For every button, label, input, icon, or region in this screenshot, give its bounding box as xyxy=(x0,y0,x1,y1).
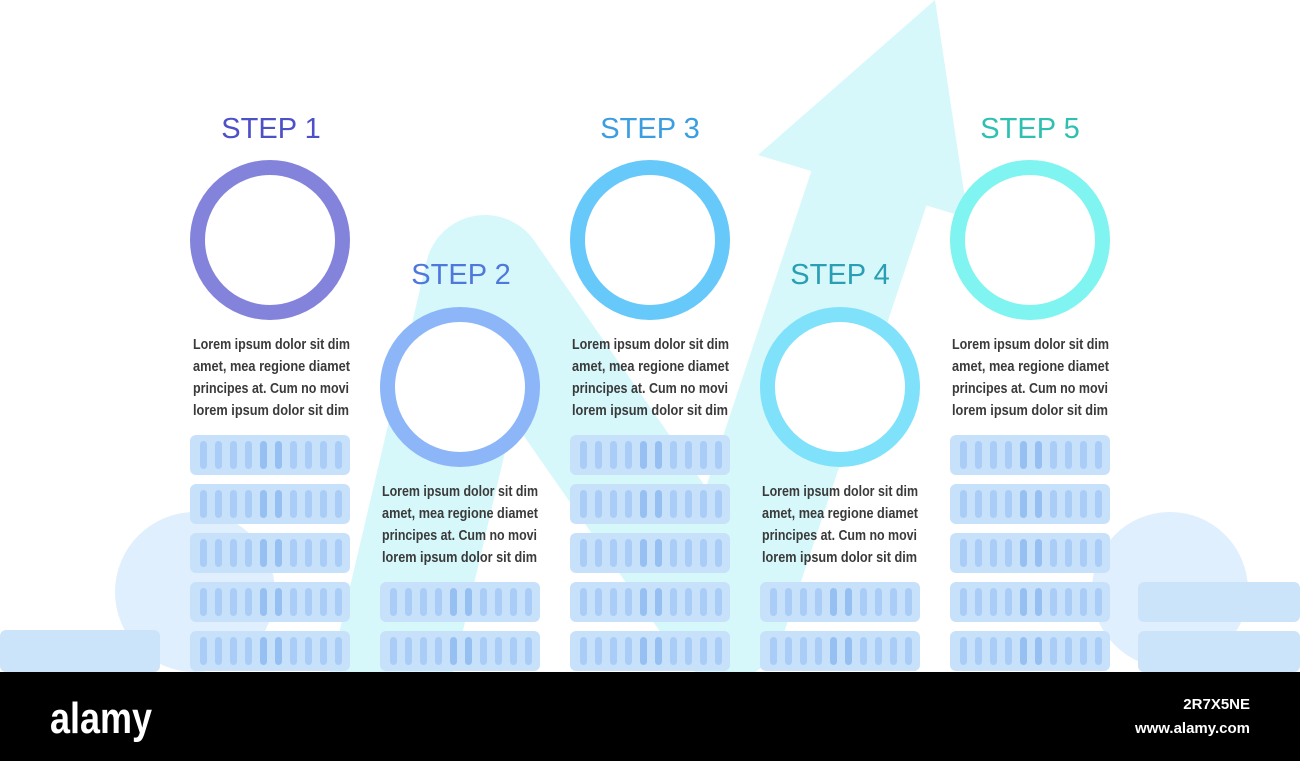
column 5 coins xyxy=(950,435,1110,671)
footer bar: alamy xyxy=(50,694,152,743)
footer bar: www.alamy.com xyxy=(1134,720,1250,737)
step 5: Lorem ipsum dolor sit dim xyxy=(952,337,1109,353)
step 3: principes at. Cum no movi xyxy=(572,381,728,397)
step 1: Lorem ipsum dolor sit dim xyxy=(193,337,350,353)
footer bar: 2R7X5NE xyxy=(1183,696,1250,713)
step 4: STEP 4 xyxy=(790,259,890,291)
step 3: lorem ipsum dolor sit dim xyxy=(572,403,728,419)
step 3 xyxy=(572,113,729,419)
step 1: amet, mea regione diamet xyxy=(193,359,350,375)
step 3: amet, mea regione diamet xyxy=(572,359,729,375)
step 2 xyxy=(382,259,538,566)
step 2: lorem ipsum dolor sit dim xyxy=(382,550,537,566)
step 3: Lorem ipsum dolor sit dim xyxy=(572,337,729,353)
step 5: amet, mea regione diamet xyxy=(952,359,1109,375)
step 1: STEP 1 xyxy=(221,113,321,145)
step 3: STEP 3 xyxy=(600,113,700,145)
step 4: lorem ipsum dolor sit dim xyxy=(762,550,917,566)
step 1 xyxy=(193,113,350,419)
step 1: principes at. Cum no movi xyxy=(193,381,349,397)
step 2: Lorem ipsum dolor sit dim xyxy=(382,484,538,500)
step 5: lorem ipsum dolor sit dim xyxy=(952,403,1108,419)
step 4: amet, mea regione diamet xyxy=(762,506,918,522)
column 2 coins xyxy=(380,582,540,671)
step 2: amet, mea regione diamet xyxy=(382,506,538,522)
step 2: STEP 2 xyxy=(411,259,511,291)
background decoration: circles and slabs xyxy=(0,512,1300,672)
step 5: principes at. Cum no movi xyxy=(952,381,1108,397)
step 4: Lorem ipsum dolor sit dim xyxy=(762,484,918,500)
step 4: principes at. Cum no movi xyxy=(762,528,917,544)
step 4 xyxy=(762,259,918,566)
step 5: STEP 5 xyxy=(980,113,1080,145)
column 1 coins xyxy=(190,435,350,671)
column 4 coins xyxy=(760,582,920,671)
arrow: rising zigzag xyxy=(385,0,968,700)
step 5 xyxy=(952,113,1109,419)
column 3 coins xyxy=(570,435,730,671)
footer bar xyxy=(0,672,1300,761)
step 2: principes at. Cum no movi xyxy=(382,528,537,544)
step 1: lorem ipsum dolor sit dim xyxy=(193,403,349,419)
